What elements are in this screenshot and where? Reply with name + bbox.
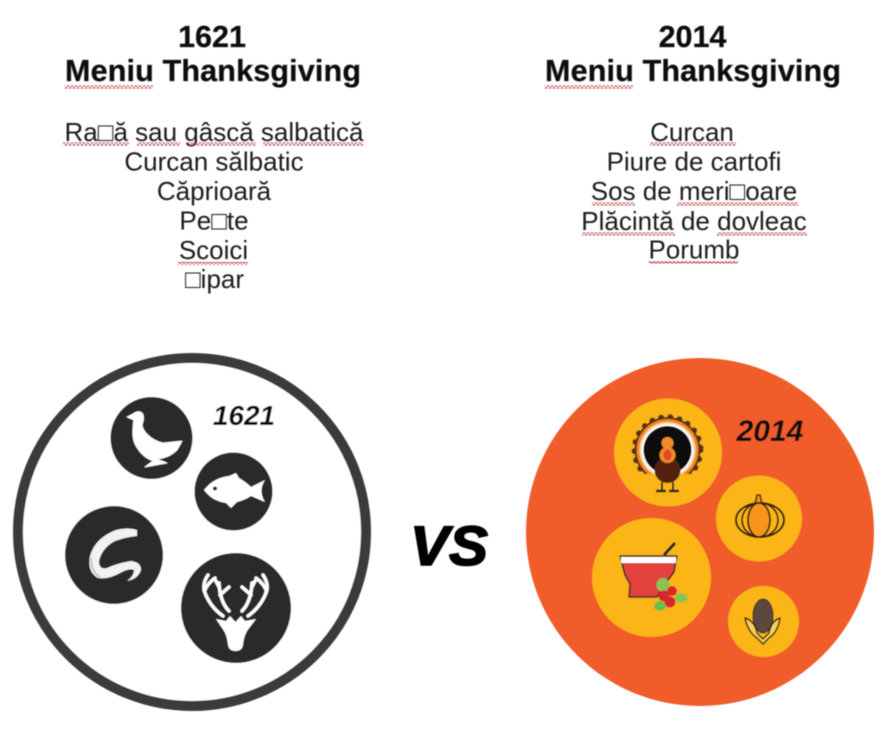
heading: 1621 menu: Meniu Thanksgiving xyxy=(65,54,361,88)
plate: 1621 xyxy=(18,358,366,706)
list: 2014 foods: Plăcintă de dovleac xyxy=(581,206,807,236)
icon: goose xyxy=(110,397,192,479)
list: 2014 foods: Porumb xyxy=(648,234,740,264)
list: 2014 foods: Piure de cartofi xyxy=(607,146,781,176)
label: 1621: 1621 xyxy=(213,400,275,431)
list: 2014 foods: Sos de meri□oare xyxy=(591,176,797,206)
plate: 2014 xyxy=(526,358,874,706)
icon: deer xyxy=(181,553,291,663)
heading: 1621 menu: 1621 xyxy=(178,20,246,54)
icon: cranberry sauce bowl xyxy=(592,518,711,637)
list: 1621 foods: Căprioară xyxy=(157,176,272,206)
panel: 2014 menu text xyxy=(545,20,841,264)
heading: 1621 menu xyxy=(65,20,361,88)
list: 1621 foods: Pe□te xyxy=(179,206,249,236)
list: 1621 foods: Ra□ă sau gâscă salbatică xyxy=(64,117,364,147)
icon: pumpkin xyxy=(716,476,802,562)
icon: turkey xyxy=(614,398,722,506)
list: 1621 foods: Scoici xyxy=(179,235,248,265)
list: 1621 foods xyxy=(64,117,364,294)
list: 1621 foods: □ipar xyxy=(185,264,244,294)
label: VS: VS xyxy=(410,514,488,577)
heading: 2014 menu: Meniu Thanksgiving xyxy=(545,54,841,88)
list: 1621 foods: Curcan sălbatic xyxy=(124,146,304,176)
list: 2014 foods: Curcan xyxy=(650,117,734,147)
icon: corn xyxy=(728,586,799,657)
list: 2014 foods xyxy=(581,117,807,264)
icon: eel xyxy=(65,506,163,604)
icon: fish xyxy=(194,452,272,530)
label: 2014: 2014 xyxy=(736,415,804,448)
heading: 2014 menu xyxy=(545,20,841,88)
panel: 1621 menu text xyxy=(63,20,364,294)
heading: 2014 menu: 2014 xyxy=(659,20,726,54)
